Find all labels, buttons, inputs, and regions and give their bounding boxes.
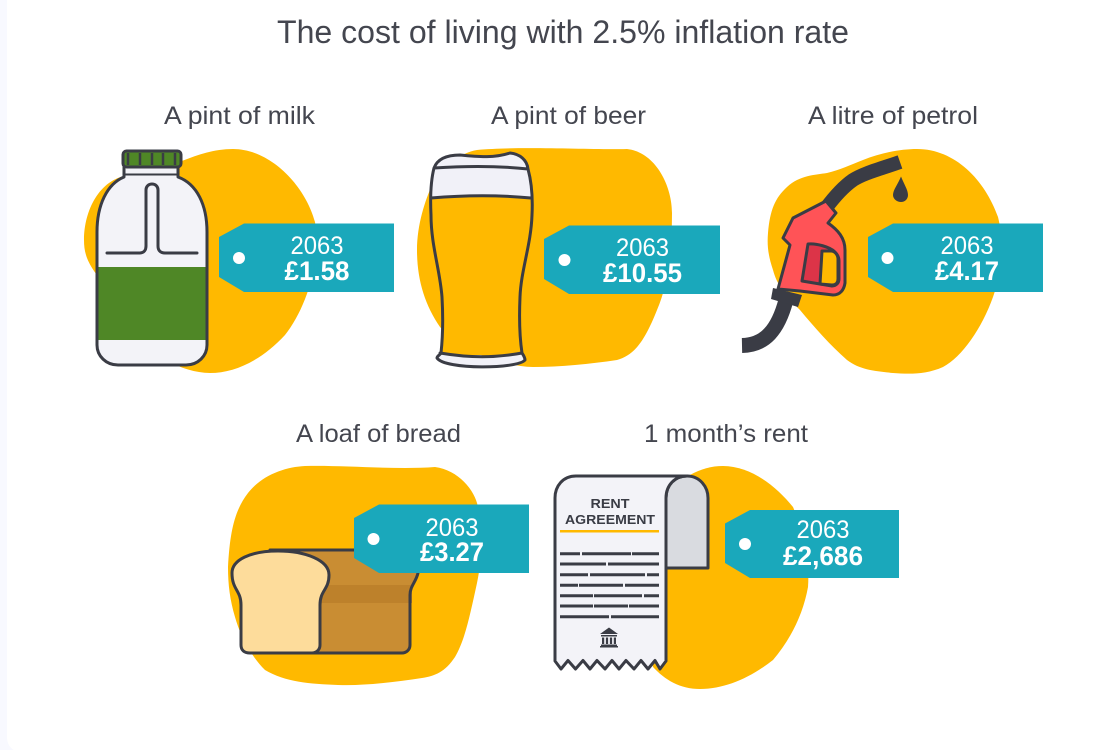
- heading: petrol: A litre of petrol: [808, 102, 978, 130]
- blob: bread: [228, 466, 481, 685]
- panel: a litre of petrol: [742, 102, 1043, 374]
- title: The cost of living with 2.5% inflation rate: [277, 14, 849, 50]
- price tag: rent: £2,686: [783, 541, 863, 571]
- panel: a loaf of bread: [228, 420, 529, 685]
- icon: beer glass: [431, 153, 532, 367]
- price tag: beer: 2063: [616, 234, 669, 262]
- price tag: milk: £1.58: [284, 256, 350, 286]
- panel: a pint of beer: [417, 102, 720, 367]
- trigger: [802, 244, 839, 286]
- bread slice: [232, 551, 329, 653]
- blob: rent: [640, 466, 808, 689]
- price tag: petrol: [868, 224, 1043, 292]
- panel: 1 month's rent: [555, 420, 899, 689]
- price tag: petrol: 2063: [940, 232, 994, 260]
- handle: [778, 201, 845, 295]
- collar: [771, 288, 802, 307]
- roll: [666, 476, 708, 568]
- document: [555, 476, 687, 669]
- price tag: rent: [725, 510, 899, 578]
- document title: RENT: [590, 496, 630, 511]
- price tag: bread: 2063: [426, 514, 478, 542]
- icon: bread loaf: [232, 550, 418, 653]
- opening: [820, 251, 838, 285]
- icon: fuel nozzle: [742, 162, 908, 346]
- price tag: milk: [219, 224, 394, 292]
- price tag: milk: 2063: [290, 232, 344, 260]
- blob: beer: [417, 148, 672, 367]
- blob: milk: [84, 149, 317, 373]
- icon: rent agreement: [555, 476, 708, 669]
- hose: [742, 300, 786, 346]
- price tag: beer: [544, 226, 720, 294]
- heading: bread: A loaf of bread: [296, 420, 461, 448]
- panel: a pint of milk: [84, 102, 394, 373]
- heading: milk: A pint of milk: [164, 102, 316, 130]
- heading: rent: 1 month’s rent: [644, 420, 808, 448]
- price tag: bread: £3.27: [420, 537, 484, 567]
- blob: petrol: [768, 149, 1002, 374]
- drop: [893, 176, 908, 202]
- spout: [826, 162, 900, 208]
- price tag: rent: 2063: [796, 516, 850, 544]
- icon: milk bottle: [97, 151, 207, 365]
- icon: rent agreement: AGREEMENT: [565, 512, 655, 527]
- heading: beer: A pint of beer: [491, 102, 646, 130]
- price tag: petrol: £4.17: [935, 256, 999, 286]
- icon: bank: [600, 628, 618, 648]
- price tag: bread: [354, 504, 529, 573]
- price tag: beer: £10.55: [603, 258, 682, 288]
